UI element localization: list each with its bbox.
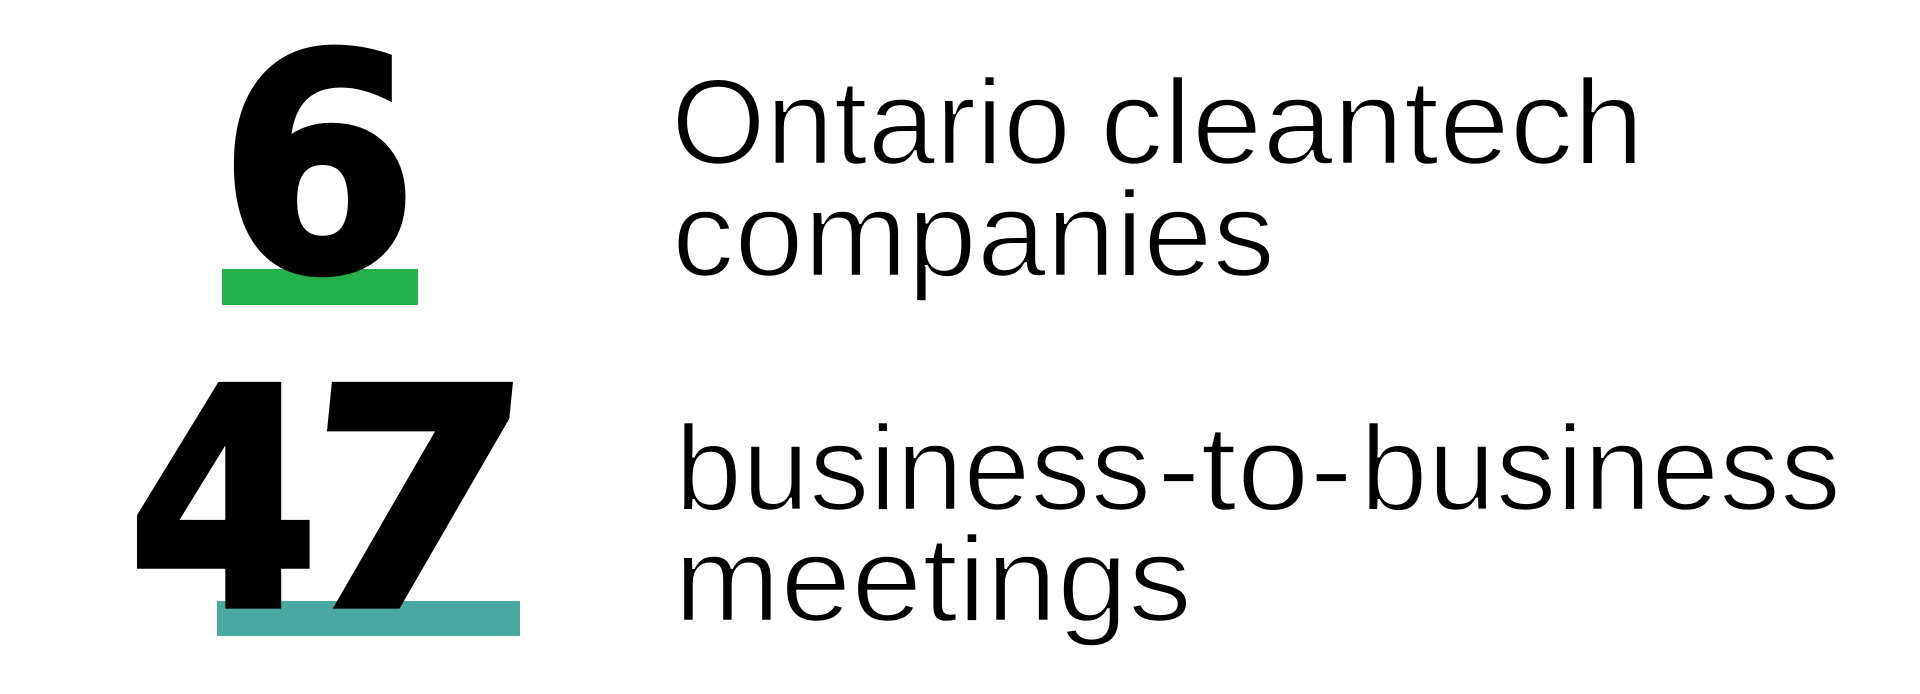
label: business-to-business meetings (674, 400, 1841, 647)
number 47 (128, 326, 539, 676)
label: Ontario cleantech companies: Ontario (671, 54, 1071, 190)
label: business-to-business meetings: meetings (674, 511, 1192, 647)
number 47: 4 (128, 327, 319, 676)
panel: companies stat (219, 0, 1644, 341)
label: Ontario cleantech companies: companies (672, 166, 1275, 302)
number 6: 6 (219, 0, 418, 341)
teal bar (217, 601, 520, 636)
label: business-to-business meetings: business (1360, 400, 1841, 536)
label: business-to-business meetings: -to- (1157, 400, 1353, 536)
label: business-to-business meetings: business (675, 400, 1151, 536)
label: Ontario cleantech companies (671, 54, 1644, 302)
number 47: 7 (286, 326, 539, 676)
panel: meetings stat (128, 326, 1841, 676)
green bar (222, 269, 418, 305)
label: Ontario cleantech companies: cleantech (1100, 54, 1644, 190)
